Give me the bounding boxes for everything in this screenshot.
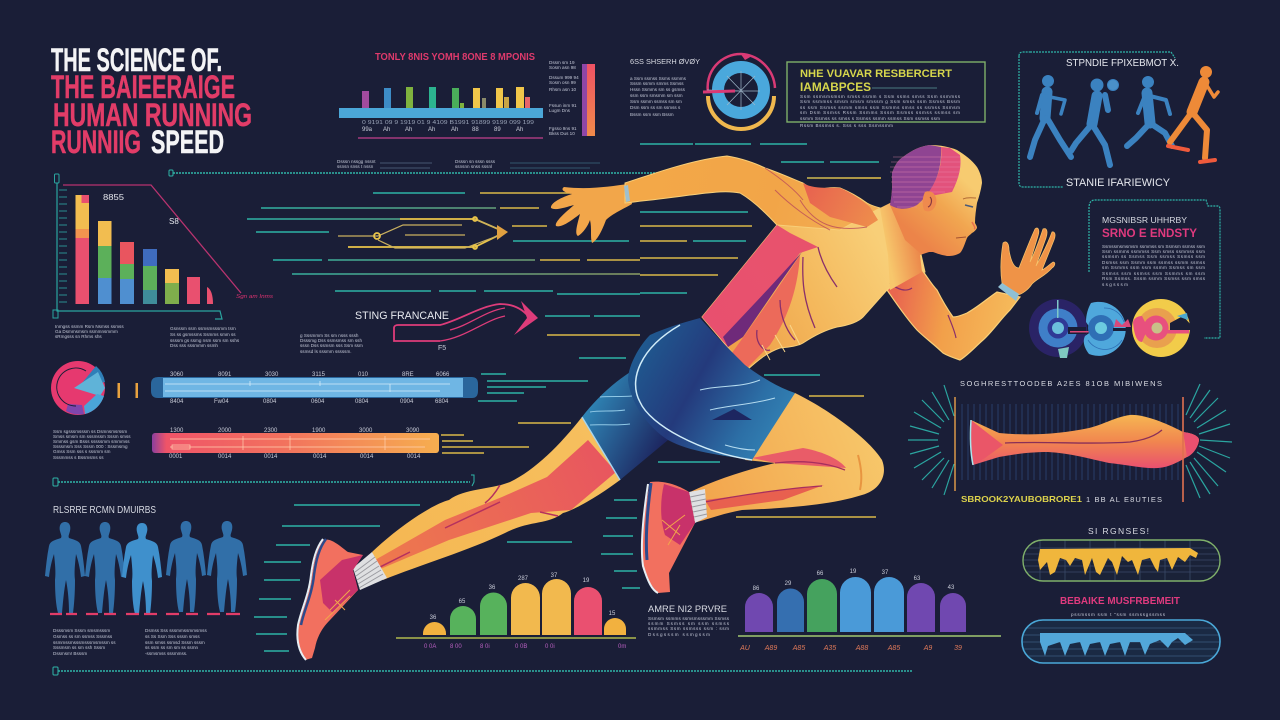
bell chart right: A85 (887, 645, 900, 652)
back sock (353, 552, 387, 590)
back muscle (702, 225, 818, 347)
front arm (887, 270, 1020, 360)
green research box: ssmm Ssmss ss smss s Ssmss ssmm ssmss Ssm ssmss ssm (800, 116, 940, 121)
blue range bar: 0604 (311, 399, 325, 405)
blue range bar: 3030 (265, 372, 279, 378)
top bar chart: Ah (516, 127, 523, 133)
red range bar: 1300 (170, 428, 184, 434)
yellow arrow diagram (338, 217, 508, 249)
text: left dial caption: Dsm ssm ss sm ssmss s (630, 105, 681, 110)
pink arrow with label: F5 (438, 345, 446, 352)
top bar chart: 0 9191 09 9 1919 01 9 4109 B1991 91899 9199 099 199 (362, 120, 534, 126)
left chart captions: sRmgsss sn Rhms shs (55, 334, 102, 339)
text: left dial caption: a Ssm ssmss Ssms ssmms (630, 76, 687, 81)
green research box (787, 62, 985, 128)
red range bar: 3000 (359, 428, 373, 434)
blue runner 3 (1127, 76, 1172, 146)
people captions: ss ssm ss sm sm ss ssmn (145, 645, 199, 650)
muscle diagram: 1 BB AL E8UTIES (1086, 495, 1162, 504)
bell chart left: 19 (583, 578, 590, 584)
bell chart caption: Ssmsm ssmms ssmsmsssmm Ssmss (648, 616, 730, 621)
people captions: Dsssmsm Sssm smsmsssm (53, 628, 110, 633)
blue capsule chart (1022, 596, 1220, 663)
people silhouettes (45, 521, 247, 614)
title: THE BAIEERAIGE (51, 69, 235, 105)
wristband front (998, 283, 1019, 301)
text: left dial caption: Sssm ssmm smms Ssmss (630, 81, 684, 86)
blue runner 2 (1071, 79, 1118, 165)
bell chart right: A89 (764, 645, 777, 652)
red range bar: 0014 (218, 454, 232, 460)
people captions: ss Ss Ssm Sss sssm smss (145, 634, 200, 639)
people captions: ssm smss ssmsd Sssm sssm (145, 640, 205, 645)
bar description text: Gmss Ssm sss s sssmm sm (53, 449, 111, 454)
wristband back (624, 185, 630, 202)
bell chart right: 43 (948, 585, 955, 591)
people captions: Dssmsm! Bsssm (53, 651, 87, 656)
blue range bar: 8RE (402, 372, 414, 378)
small note texts above the dotted line: ssnsnn snss sssnl (455, 164, 492, 169)
donut 1 (1029, 299, 1090, 358)
bell chart left: 65 (459, 599, 466, 605)
bell chart right: 37 (882, 570, 889, 576)
rays (908, 384, 1232, 498)
stride frequency panel (1019, 52, 1218, 189)
top bar chart: Dssm sm 19 (549, 60, 575, 65)
green research box: NHE VUAVAR RESBERCERT (800, 68, 952, 80)
bar description text: Sssmmss s Bssmsms ss (53, 455, 104, 460)
stride frequency panel: STANIE IFARIEWICY (1066, 177, 1171, 189)
left chart captions: Dss sss sssmmm ssmh (170, 343, 218, 348)
green research box: sm Dsm Ssmss Rssm Ssmms Sssm Ssmss ssmss ssmss sm (800, 110, 960, 115)
bar description text: Ssm sgsssmsssm ss Dsmnsmsrssm (53, 429, 127, 434)
blue runner 1 (1030, 76, 1071, 157)
back leg muscle (375, 440, 616, 570)
top bar chart: 99a (362, 127, 373, 133)
top bar chart: Sosm asn 98 (549, 65, 576, 70)
green research box: Ssm ssmmss smsm smsm smssm g Ssm smss ssm Ssmss Bssm (800, 99, 960, 104)
title: SPEED (151, 124, 224, 160)
bell chart right: 19 (850, 569, 857, 575)
bell chart right: A9 (923, 645, 932, 652)
back leg (372, 417, 620, 580)
bell chart left: 8 0i (480, 644, 490, 650)
front hand (1001, 228, 1055, 295)
bell chart left: 37 (551, 573, 558, 579)
blue range bar: 0904 (400, 399, 414, 405)
hair (890, 145, 941, 209)
left chart captions: ssmsd ls sssmm sssssm. (300, 349, 352, 354)
bell chart left: 8 00 (450, 644, 462, 650)
circular dial (703, 53, 775, 129)
people captions: Sssmsm ss sm ssh Sssm (53, 645, 105, 650)
stride length panel: Rsm Ssmss. Sssm ssmm Ssmss ssm smss (1102, 276, 1206, 281)
stride frequency panel: STPNDIE FPIXEBMOT X. (1066, 58, 1179, 69)
bell chart right: A88 (855, 645, 868, 652)
top bar chart: Fgsso 9ns 91 (549, 126, 577, 131)
top bar chart: Fssun inm 91 (549, 103, 577, 108)
stride length panel: SRNO E ENDSTY (1102, 226, 1197, 240)
bell chart right: A35 (823, 645, 836, 652)
head (890, 145, 982, 256)
green research box: Ssm ssmsmsmsm smss ssmm s Ssm ssms smss Ssm ssmmss (800, 94, 961, 99)
top bar chart: Lugm Dns (549, 108, 571, 113)
yellow capsule chart (1023, 526, 1220, 581)
small note texts above the dotted line: ssnsn snss t nssn (337, 164, 374, 169)
donut charts (1029, 299, 1192, 358)
red range bar: 2000 (218, 428, 232, 434)
text: left dial caption (630, 57, 700, 117)
bar description text: Smss smsm sm sssmssm Sssm smss (53, 434, 131, 439)
blue range bar (151, 372, 478, 405)
bell chart right: A85 (792, 645, 805, 652)
yellow capsule chart: SI RGNSES! (1088, 526, 1149, 536)
top bar chart: Dssum 999 94 (549, 75, 579, 80)
muscle diagram: SBROOK2YAUBOBRORE1 (961, 494, 1082, 504)
people captions: Gsmss ss sm ssmss Sssmss (53, 634, 113, 639)
bell chart left: 0 0A (424, 644, 436, 650)
face features (963, 198, 976, 199)
bell chart left (396, 573, 636, 650)
left chart captions: g Sssmmm Ss sm nsss sssh (300, 333, 359, 338)
left chart captions: ssssm gs ssmg nsm ssm sm sshs (170, 338, 240, 343)
blue range bar: 3115 (312, 372, 326, 378)
bell chart left: 36 (430, 615, 437, 621)
blue range bar: 6804 (435, 399, 449, 405)
back shoe (297, 539, 363, 660)
left chart captions: Gsnssm ssm ssmsmsssmm tsrn (170, 326, 236, 331)
front leg (690, 393, 884, 522)
deltoid (803, 183, 878, 227)
bell chart right (738, 569, 1001, 652)
bell chart right: 86 (753, 586, 760, 592)
text: left dial caption: Hssn Ssmms sm ss gsmss (630, 87, 686, 92)
top bar chart: TONLY 8NIS YOMH 8ONE 8 MPONIS (375, 52, 535, 63)
bell chart left: 0 0B (515, 644, 527, 650)
front sock (689, 489, 707, 523)
bell chart right: AU (739, 645, 751, 652)
small note texts above the dotted line: Dsssn nssgg nssnt (337, 159, 376, 164)
red range bar (152, 428, 439, 460)
bell chart left: 15 (609, 611, 616, 617)
bell chart caption: Dssgsssm ssmgssm (648, 632, 710, 637)
red range bar: 0014 (264, 454, 278, 460)
bell chart caption: ssmmss Ssm ssmsss ssm : ssm (648, 626, 729, 631)
shorts front (628, 318, 795, 460)
red range bar: 0014 (360, 454, 374, 460)
top bar chart: Sosm osn 99 (549, 80, 576, 85)
bell chart right: 63 (914, 576, 921, 582)
front leg muscle (752, 448, 846, 468)
small note texts above the dotted line: Dsssn sn sssn ssss (455, 159, 496, 164)
title (51, 42, 252, 160)
bell chart caption: AMRE NI2 PRVRE (648, 604, 727, 614)
top bar chart: Ah (405, 127, 412, 133)
people captions (53, 628, 207, 656)
blue capsule chart: pssmssm ssm t "ssm ssmssgssmss (1071, 612, 1166, 617)
green research box: Rssm Bssmss s. Sss s sss Ssmssmm (800, 123, 893, 128)
bell chart right: 39 (954, 645, 962, 652)
blue range bar: 6066 (436, 372, 450, 378)
bar description text: Smmss gsm Bsss sssssmm smmmss (53, 439, 130, 444)
blue capsule chart: BEBAIKE MUSFRBEMEIT (1060, 596, 1180, 607)
bar description text (53, 429, 131, 460)
shorts back panel (582, 366, 668, 480)
dotted rule middle (53, 475, 474, 486)
blue range bar: 0804 (263, 399, 277, 405)
stride length panel: sm Ssmms ssm ssm ssmm Ssmss sm ssm (1102, 265, 1205, 270)
blue range bar: 0804 (355, 399, 369, 405)
dotted rule top (169, 170, 680, 176)
text: left dial caption: ssm ssm smsmm sm ssm (630, 93, 683, 98)
people captions: ssmmssmsssmsssmsmssm ss (53, 640, 116, 645)
bell chart left: 0 0i (545, 644, 555, 650)
bar description text: Ssssmsm Sss Sssm 000 : Sssmsmg (53, 444, 128, 449)
left chart captions: sssn Dss ssmsm sss Ssm ssm (300, 343, 363, 348)
pink arrow with label (355, 301, 538, 352)
top bar chart: 89 (494, 127, 501, 133)
text: left dial caption: Bssm ssm ssm Bssm (630, 112, 674, 117)
left chart captions: Ss ss gsmssms Ssmms smm ss (170, 332, 236, 337)
red range bar: 3090 (406, 428, 420, 434)
dotted rule bottom (53, 667, 913, 675)
green research box: IAMABPCES (800, 80, 871, 94)
left bar chart: S8 (169, 217, 179, 226)
background stripes (962, 404, 1178, 480)
runner figure (297, 145, 1055, 660)
donut 3 (1132, 299, 1192, 357)
top bar chart: Rhsm asn 10 (549, 87, 577, 92)
small note texts above the dotted line (337, 159, 600, 169)
pink arrow with label: STING FRANCANE (355, 310, 449, 322)
top bar chart: Ah (451, 127, 458, 133)
top bar chart (275, 52, 595, 138)
top bar chart: Bkss Dus 10 (549, 131, 575, 136)
stride length panel: Ssmss ssm ssmss ssm Ssmms sm ssm (1102, 271, 1205, 276)
blue range bar: 010 (358, 372, 369, 378)
stride length panel: Ssmssmsmsmsm ssmmss sm Ssmsm ssmss ssm (1102, 244, 1205, 249)
pie chart (51, 361, 138, 415)
blue range bar: Fw04 (214, 399, 229, 405)
title: HUMAN RUNNING (53, 97, 252, 133)
red range bar: 0014 (313, 454, 327, 460)
top bar chart: Ah (428, 127, 435, 133)
orange runner (1168, 66, 1218, 162)
bell chart left: 36 (489, 585, 496, 591)
bell chart right: 66 (817, 571, 824, 577)
people captions: Dsmss Sss sssmmssmmsmss (145, 628, 207, 633)
left chart captions: Dsssmg Dss ssmsmss sm ssh (300, 338, 362, 343)
muscle diagram (908, 379, 1232, 504)
title: THE SCIENCE OF. (51, 42, 222, 78)
red range bar: 0001 (169, 454, 183, 460)
muscle body (970, 415, 1199, 468)
stride length panel (1089, 200, 1220, 338)
people row heading: RLSRRE RCMN DMUIRBS (53, 505, 156, 516)
ear (923, 191, 936, 211)
back arm (625, 156, 890, 265)
stride length panel: MGSNIBSR UHHRBY (1102, 215, 1187, 225)
bell chart caption: ssmm Ssmss sm ssm ssmss (648, 621, 730, 626)
donut 2 (1084, 302, 1134, 356)
text: left dial caption: Ssm ssmm ssmss sm sm (630, 99, 682, 104)
people captions: -ssmsmss sssmmss. (145, 651, 187, 656)
blue range bar: 3060 (170, 372, 184, 378)
bell chart caption (648, 604, 730, 637)
left bar chart: 8855 (103, 193, 125, 202)
red range bar: 0014 (407, 454, 421, 460)
green research box: ss ssm Ssmss ssmm smss ssm Ssmms smss ss ssmss Ssmsm (800, 105, 960, 110)
stride length panel: ssgsssm (1102, 282, 1128, 287)
text: left dial caption: 6SS SHSERH ØVØY (630, 57, 700, 66)
torso (702, 208, 925, 370)
top bar chart: Ah (383, 127, 390, 133)
red range bar: 1900 (312, 428, 326, 434)
vertical bars (954, 397, 956, 491)
left bar chart (53, 174, 273, 319)
left bar chart: Sgn am Inms (236, 294, 273, 300)
title: RUNNIIG (51, 124, 141, 160)
muscle diagram: SOGHRESTTOODEB A2ES 81OB MIBIWENS (960, 379, 1162, 388)
blue range bar: 8091 (218, 372, 232, 378)
red range bar: 2300 (264, 428, 278, 434)
left chart captions: Inmgss ssmm Rsm Nsmss ssmss (55, 324, 124, 329)
neck (880, 203, 935, 290)
bell chart left: 287 (518, 576, 529, 582)
front shoe (642, 482, 695, 593)
bell chart right: 29 (785, 581, 792, 587)
left chart captions: Ga Dsmmsmsm ssmmnsmmm (55, 329, 118, 334)
stride length panel: Ssm ssmms ssmmss Ssm smss ssmmss ssm (1102, 249, 1205, 254)
speed lines (247, 144, 881, 651)
bell chart left: 0m (618, 644, 626, 650)
blue range bar: 8404 (170, 399, 184, 405)
top bar chart: 88 (472, 127, 479, 133)
stride length panel: ssmsm ss Ssmss Ssm ssmss Ssmss ssm (1102, 254, 1205, 259)
left chart captions (55, 324, 363, 354)
back hand (551, 184, 632, 243)
stride length panel: Dsmss ssm Ssmm ssm ssmss ssmm ssmss (1102, 260, 1206, 265)
